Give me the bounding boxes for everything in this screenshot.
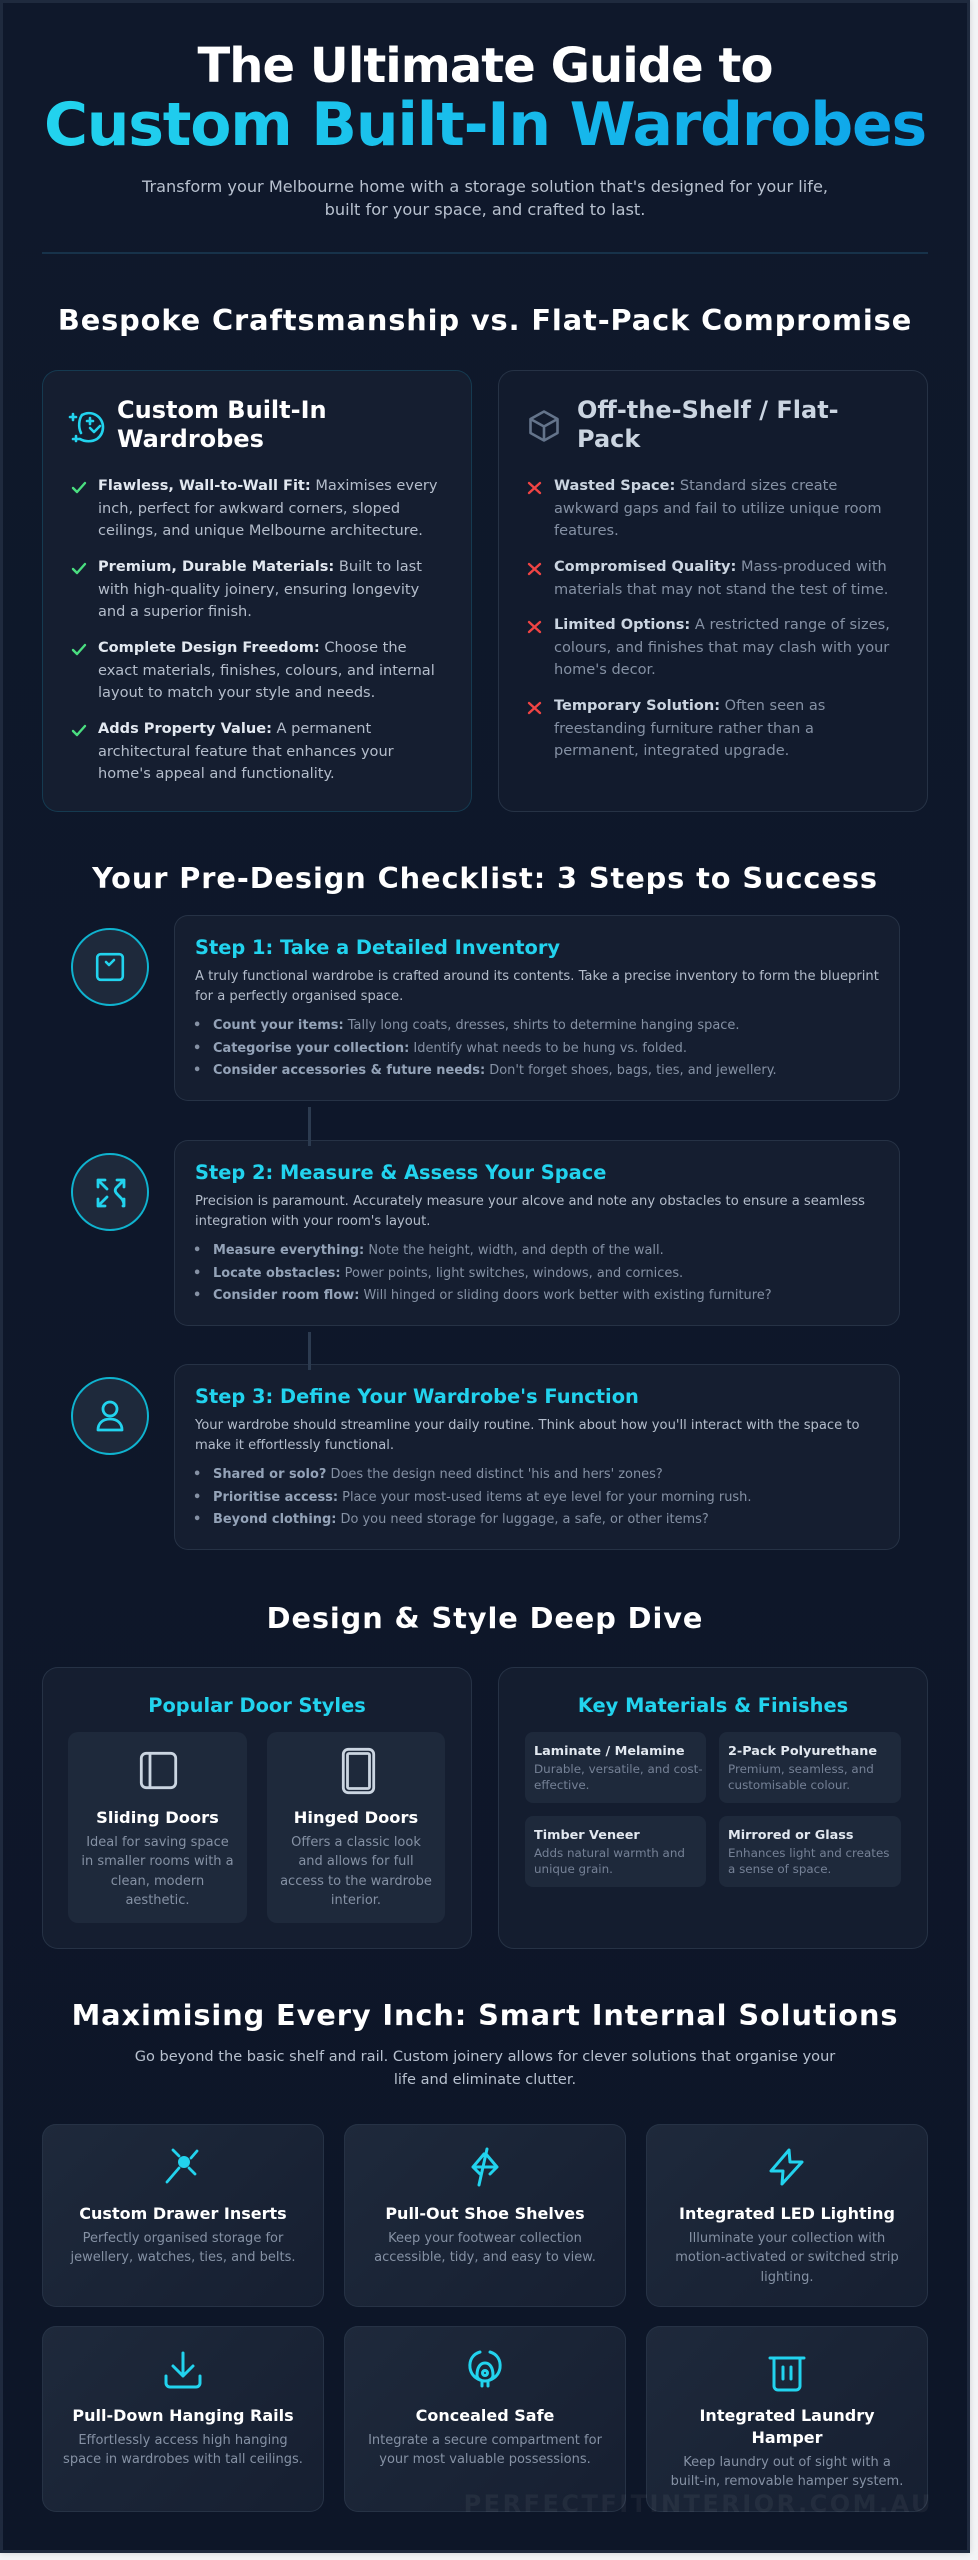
step 1 card: • <box>193 1041 201 1056</box>
card: hanging rails: space in wardrobes with tall ceilings. <box>63 2452 303 2467</box>
step 3 card: • <box>193 1490 201 1505</box>
step 3 card: make it effortlessly functional. <box>195 1438 394 1453</box>
drawback: temporary: freestanding furniture rather than a <box>554 720 814 737</box>
drawback: temporary <box>528 697 825 759</box>
card: drawer inserts: Custom Drawer Inserts <box>79 2204 287 2223</box>
step 2 card: Step 2: Measure & Assess Your Space <box>195 1161 606 1184</box>
card: sliding doors: Ideal for saving space <box>86 1835 229 1850</box>
title line 2 gradient: Custom Built-In Wardrobes <box>44 90 926 160</box>
drawback: wasted space: Wasted Space: Standard sizes create <box>554 477 837 494</box>
step 3 card: Shared or solo? Does the design need distinct 'his and hers' zones? <box>213 1467 663 1482</box>
drawback: options: colours, and finishes that may clash with your <box>554 639 889 656</box>
benefit: design freedom: layout to match your style and needs. <box>98 684 375 701</box>
material: mirrored: Enhances light and creates <box>728 1846 889 1860</box>
icon: hamper <box>768 2356 806 2392</box>
step 2 card: • <box>193 1266 201 1281</box>
watermark: PERFECTFITINTERIOR.COM.AU <box>464 2490 933 2518</box>
card: sliding doors: Sliding Doors <box>96 1808 219 1827</box>
panel: off-the-shelf <box>498 370 928 812</box>
card: sliding doors: aesthetic. <box>125 1893 190 1908</box>
step 1 card: Categorise your collection: Identify what needs to be hung vs. folded. <box>213 1041 687 1056</box>
step 3 card <box>174 1364 900 1550</box>
step 3 <box>71 1364 900 1550</box>
card: concealed safe: Integrate a secure compartment for <box>368 2433 602 2448</box>
benefit: fit: ceilings, and unique Melbourne architecture. <box>98 522 423 539</box>
step 1 card: for a perfectly organised space. <box>195 989 403 1004</box>
step 2 card: integration with your room's layout. <box>195 1214 430 1229</box>
step 2 card: • <box>193 1288 201 1303</box>
card: LED lighting: Illuminate your collection with <box>689 2231 885 2246</box>
icon: lightning bolt <box>769 2148 804 2186</box>
drawback: options: Limited Options: A restricted range of sizes, <box>554 616 890 633</box>
drawback: temporary: Temporary Solution: Often seen as <box>554 697 825 714</box>
card: hinged doors: and allows for full <box>298 1854 414 1869</box>
step 1 card: • <box>193 1018 201 1033</box>
panel heading <box>117 396 327 453</box>
icon: shoe shelves <box>471 2148 498 2186</box>
section intro: life and eliminate clutter. <box>394 2071 576 2088</box>
card: sliding doors <box>68 1732 247 1923</box>
step 1 <box>71 915 900 1101</box>
card: shoe shelves: Keep your footwear collection <box>388 2231 582 2246</box>
benefit: value: home's appeal and functionality. <box>98 765 335 782</box>
heading: design: Design & Style Deep Dive <box>267 1601 703 1635</box>
panel: custom built-in wardrobes <box>42 370 472 812</box>
step 3 card: • <box>193 1512 201 1527</box>
step 1 card: A truly functional wardrobe is crafted around its contents. Take a precise inventory to form the blueprint <box>195 969 879 984</box>
card: drawer inserts: jewellery, watches, ties, and belts. <box>70 2250 296 2265</box>
benefit: fit <box>72 477 437 539</box>
material: laminate: Laminate / Melamine <box>534 1744 685 1759</box>
card: hinged doors: Hinged Doors <box>294 1808 418 1827</box>
step 2 card: Consider room flow: Will hinged or sliding doors work better with existing furniture? <box>213 1288 772 1303</box>
benefit: fit: inch, perfect for awkward corners, sloped <box>98 500 400 517</box>
panel heading <box>577 396 839 453</box>
card: LED lighting: lighting. <box>760 2270 814 2285</box>
drawback: quality <box>528 558 888 598</box>
heading: checklist: Your Pre-Design Checklist: 3 Steps to Success <box>92 861 878 895</box>
material: mirrored: Mirrored or Glass <box>728 1828 853 1843</box>
benefit: materials: and a superior finish. <box>98 603 252 620</box>
card: laundry hamper: Integrated Laundry <box>699 2406 875 2425</box>
card: LED lighting: Integrated LED Lighting <box>679 2204 895 2223</box>
panel heading: Popular Door Styles <box>148 1694 366 1717</box>
material: polyurethane <box>719 1732 901 1803</box>
material: laminate: effective. <box>534 1778 589 1792</box>
card: laundry hamper: Hamper <box>751 2428 823 2447</box>
card: hinged doors: access to the wardrobe <box>280 1874 432 1889</box>
card: concealed safe <box>344 2326 626 2512</box>
card: hanging rails: Pull-Down Hanging Rails <box>72 2406 294 2425</box>
card: sliding doors: clean, modern <box>111 1874 204 1889</box>
subtitle: Transform your Melbourne home with a storage solution that's designed for your life, <box>142 177 828 196</box>
panel heading: Wardrobes <box>117 425 264 453</box>
card: hinged doors <box>267 1732 445 1923</box>
step 2 badge <box>71 1153 149 1231</box>
panel: materials <box>498 1667 928 1949</box>
step 2 card: Locate obstacles: Power points, light switches, windows, and cornices. <box>213 1266 683 1281</box>
card: shoe shelves: accessible, tidy, and easy to view. <box>374 2250 596 2265</box>
drawback: wasted space <box>528 477 882 539</box>
material: veneer <box>525 1816 706 1887</box>
section intro <box>135 2048 836 2088</box>
icon: download arrow <box>164 2352 202 2388</box>
heading: internal solutions: Maximising Every Inch: Smart Internal Solutions <box>72 1998 898 2032</box>
connector 2 <box>308 1332 311 1370</box>
title line 1: The Ultimate Guide to <box>197 38 773 94</box>
benefit: design freedom: Complete Design Freedom: Choose the <box>98 639 407 656</box>
step 1 card: • <box>193 1063 201 1078</box>
step 1 badge <box>71 928 149 1006</box>
card: hinged doors: Offers a classic look <box>291 1835 421 1850</box>
drawback: temporary: permanent, integrated upgrade. <box>554 742 789 759</box>
material: laminate <box>525 1732 706 1803</box>
step 2 card: Measure everything: Note the height, width, and depth of the wall. <box>213 1243 664 1258</box>
card: laundry hamper <box>646 2326 928 2512</box>
card: sliding doors: in smaller rooms with a <box>81 1854 234 1869</box>
step 3 card: Your wardrobe should streamline your daily routine. Think about how you'll interact with the space to <box>195 1418 859 1433</box>
step 2 card: • <box>193 1243 201 1258</box>
section intro: Go beyond the basic shelf and rail. Custom joinery allows for clever solutions that organise your <box>135 2048 835 2065</box>
benefit: fit: Flawless, Wall-to-Wall Fit: Maximises every <box>98 477 437 494</box>
icon: safe <box>468 2350 502 2388</box>
material: polyurethane: Premium, seamless, and <box>728 1762 874 1776</box>
material: mirrored: a sense of space. <box>728 1862 831 1876</box>
drawback: options <box>528 616 890 678</box>
card: drawer inserts <box>42 2124 324 2307</box>
card: concealed safe: your most valuable possessions. <box>379 2452 591 2467</box>
card: LED lighting: motion-activated or switched strip <box>675 2250 899 2265</box>
step 1 card <box>174 915 900 1101</box>
step 2 card: Precision is paramount. Accurately measure your alcove and note any obstacles to ensure a seamless <box>195 1194 865 1209</box>
drawback: wasted space: features. <box>554 522 619 539</box>
card: hanging rails: Effortlessly access high hanging <box>78 2433 288 2448</box>
benefit: value: architectural feature that enhances your <box>98 743 394 760</box>
drawback: options: home's decor. <box>554 661 656 678</box>
drawback: wasted space: awkward gaps and fail to utilize unique room <box>554 500 882 517</box>
panel heading: Pack <box>577 425 640 453</box>
benefit: value: Adds Property Value: A permanent <box>98 720 371 737</box>
icon: sparkle check <box>68 412 104 442</box>
heading: comparison: Bespoke Craftsmanship vs. Flat-Pack Compromise <box>58 303 912 337</box>
drawback: quality: materials that may not stand the test of time. <box>554 581 888 598</box>
step 3 card: Beyond clothing: Do you need storage for luggage, a safe, or other items? <box>213 1512 709 1527</box>
subtitle <box>142 177 828 219</box>
benefit: value <box>72 720 394 782</box>
step 3 badge <box>71 1377 149 1455</box>
step 1 card: Consider accessories & future needs: Don't forget shoes, bags, ties, and jewellery. <box>213 1063 777 1078</box>
material: polyurethane: 2-Pack Polyurethane <box>728 1744 877 1759</box>
card: shoe shelves <box>344 2124 626 2307</box>
card: hanging rails <box>42 2326 324 2512</box>
step 2 card <box>174 1140 900 1326</box>
benefit: design freedom <box>72 639 435 701</box>
material: mirrored <box>719 1816 901 1887</box>
material: veneer: unique grain. <box>534 1862 613 1876</box>
connector 1 <box>308 1107 311 1146</box>
drawback: quality: Compromised Quality: Mass-produced with <box>554 558 887 575</box>
step 2 <box>71 1140 900 1326</box>
icon: sliding door <box>140 1752 178 1790</box>
subtitle: built for your space, and crafted to last. <box>325 200 645 219</box>
card: drawer inserts: Perfectly organised storage for <box>83 2231 283 2246</box>
icon: drawer inserts <box>166 2148 198 2184</box>
icon: box <box>529 410 559 442</box>
card: laundry hamper: built-in, removable hamper system. <box>671 2474 903 2489</box>
card: laundry hamper: Keep laundry out of sight with a <box>683 2455 891 2470</box>
benefit: design freedom: exact materials, finishes, colours, and internal <box>98 662 435 679</box>
material: veneer: Timber Veneer <box>534 1828 640 1843</box>
benefit: materials <box>72 558 422 620</box>
card: hinged doors: interior. <box>331 1893 381 1908</box>
card: LED lighting <box>646 2124 928 2307</box>
icon: hinged door <box>342 1748 376 1794</box>
card: concealed safe: Concealed Safe <box>416 2406 554 2425</box>
panel: door styles <box>42 1667 472 1949</box>
material: laminate: Durable, versatile, and cost- <box>534 1762 703 1776</box>
benefit: materials: Premium, Durable Materials: Built to last <box>98 558 422 575</box>
material: polyurethane: customisable colour. <box>728 1778 850 1792</box>
benefit: materials: with high-quality joinery, ensuring longevity <box>98 581 419 598</box>
step 3 card: Prioritise access: Place your most-used items at eye level for your morning rush. <box>213 1490 751 1505</box>
panel heading: Off-the-Shelf / Flat- <box>577 396 839 424</box>
step 1 card: Step 1: Take a Detailed Inventory <box>195 936 560 959</box>
step 3 card: • <box>193 1467 201 1482</box>
step 3 card: Step 3: Define Your Wardrobe's Function <box>195 1385 639 1408</box>
panel heading: Custom Built-In <box>117 396 327 424</box>
panel heading: Key Materials & Finishes <box>578 1694 848 1717</box>
material: veneer: Adds natural warmth and <box>534 1846 685 1860</box>
card: shoe shelves: Pull-Out Shoe Shelves <box>385 2204 585 2223</box>
step 1 card: Count your items: Tally long coats, dresses, shirts to determine hanging space. <box>213 1018 739 1033</box>
